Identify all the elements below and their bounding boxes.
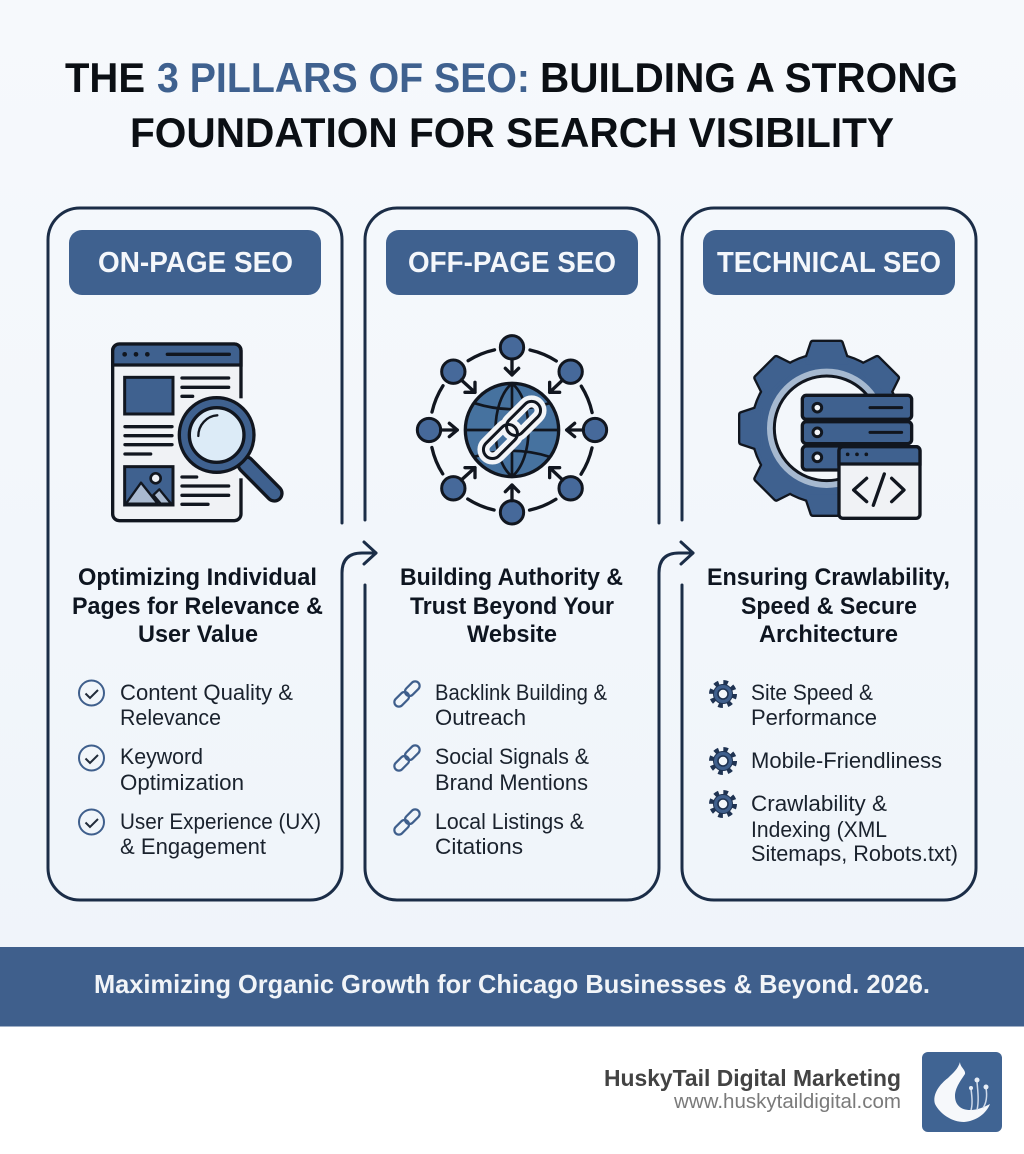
subheading: technical [707, 564, 950, 648]
heading pill: off-page [386, 230, 638, 295]
panel outline: off-page [365, 208, 693, 900]
subheading: off-page: Trust Beyond Your [410, 593, 614, 620]
link icon 2 [393, 744, 421, 772]
panel: off-page SEO [365, 208, 693, 900]
subheading: technical: Ensuring Crawlability, [707, 564, 950, 591]
list: off-page items: Social Signals & [435, 744, 589, 769]
subheading: on-page: Optimizing Individual [78, 564, 317, 591]
list: on-page items: Optimization [120, 770, 244, 795]
footer brand text: HuskyTail Digital Marketing [604, 1065, 901, 1091]
gear icon 1 [712, 682, 734, 706]
title: THE [65, 54, 145, 101]
subheading: on-page: Pages for Relevance & [72, 593, 323, 620]
list: on-page items: Relevance [120, 705, 221, 730]
title: 3 PILLARS OF SEO: [157, 54, 530, 101]
list: on-page items: Content Quality & [120, 680, 293, 705]
subheading: technical: Speed & Secure [741, 593, 917, 620]
icon: company logo [922, 1052, 1002, 1132]
list: off-page items: Brand Mentions [435, 770, 588, 795]
icon: gear with servers and code window [742, 343, 920, 518]
heading pill: on-page: ON-PAGE SEO [98, 247, 293, 279]
list: technical items [712, 680, 958, 866]
arrow: off-page to technical [681, 542, 693, 564]
panel outline: on-page [48, 208, 376, 900]
gear icon 2 [712, 750, 734, 772]
list: on-page items: Keyword [120, 744, 203, 769]
subheading: off-page: Website [467, 621, 557, 648]
list: off-page items [393, 680, 607, 859]
list: technical items: Site Speed & [751, 680, 873, 705]
list: technical items: Sitemaps, Robots.txt) [751, 841, 958, 866]
list: on-page items [79, 680, 321, 859]
arrow: on-page to off-page [364, 542, 376, 564]
list: off-page items: Backlink Building & [435, 680, 607, 705]
list: technical items: Performance [751, 705, 877, 730]
heading pill: on-page [69, 230, 321, 295]
list: off-page items: Local Listings & [435, 809, 584, 834]
link icon 3 [393, 808, 421, 836]
subheading: off-page [400, 564, 623, 648]
banner [0, 947, 1024, 1026]
list: technical items: Crawlability & [751, 791, 887, 816]
panel: technical SEO [682, 208, 976, 900]
title [65, 54, 958, 156]
list: off-page items: Outreach [435, 705, 526, 730]
footer brand text: www.huskytaildigital.com [673, 1091, 901, 1113]
check icon 2 [79, 746, 104, 770]
list: technical items: Mobile-Friendliness [751, 748, 942, 773]
panel outline: technical [682, 208, 976, 900]
list: off-page items: Citations [435, 834, 523, 859]
subheading: on-page: User Value [138, 621, 258, 648]
subheading: off-page: Building Authority & [400, 564, 623, 591]
list: on-page items: User Experience (UX) [120, 809, 321, 834]
check icon 3 [79, 810, 104, 834]
icon: globe with link and nodes [417, 336, 607, 524]
title: BUILDING A STRONG [540, 54, 958, 101]
check icon 1 [79, 680, 104, 706]
subheading: on-page [72, 564, 323, 648]
gear icon 3 [712, 792, 734, 816]
list: on-page items: & Engagement [120, 834, 266, 859]
list: technical items: Indexing (XML [751, 817, 887, 842]
title: FOUNDATION FOR SEARCH VISIBILITY [130, 109, 894, 156]
heading pill: technical [703, 230, 955, 295]
footer brand text [604, 1065, 901, 1113]
heading pill: off-page: OFF-PAGE SEO [408, 247, 616, 279]
icon: web page with magnifier [113, 344, 274, 521]
banner: Maximizing Organic Growth for Chicago Businesses & Beyond. 2026. [94, 969, 930, 999]
subheading: technical: Architecture [759, 621, 898, 648]
panel: on-page SEO [48, 208, 376, 900]
link icon 1 [393, 680, 421, 708]
heading pill: technical: TECHNICAL SEO [717, 247, 941, 279]
